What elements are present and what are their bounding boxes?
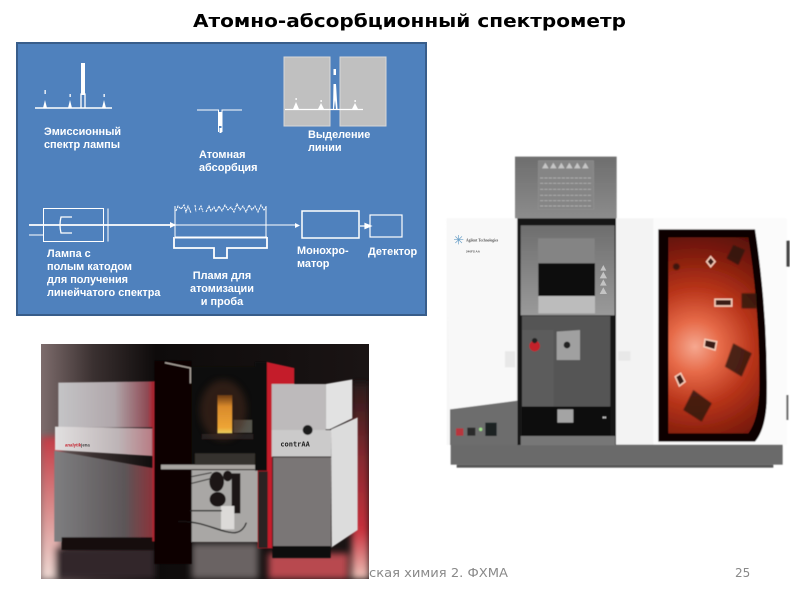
left unit [58,381,152,427]
label: lamp: для получения [47,274,128,286]
icon: warning triangles [600,265,607,294]
icon: Agilent spark [454,235,463,244]
label: lamp: полым катодом [47,261,132,273]
right unit [272,384,326,430]
centre cabinet [154,361,192,564]
side handle [786,241,790,267]
label: emission spectrum: Эмиссионный [44,126,121,138]
diagram: hollow cathode lamp [29,208,175,242]
chart: line isolation slits [284,57,386,126]
diagram: monochromator [302,211,359,238]
lid [515,157,617,218]
photo: Agilent spectrometer [447,157,790,468]
mechanics [209,471,240,513]
label: line isolation: линии [308,142,342,154]
label: emission spectrum: спектр лампы [44,139,120,151]
diagram: flame atomizer [170,204,300,258]
label: atomic absorption: абсорбция [199,162,257,174]
label: flame: и проба [201,296,244,308]
page number: 25 [735,566,750,580]
photo: contrAA spectrometer [41,344,369,579]
label: atomic absorption: Атомная [199,149,245,161]
brand: analytikjena: analytikjena [65,442,90,447]
title: Атомно-абсорбционный спектрометр [193,11,626,32]
chart: atomic absorption [197,110,242,133]
window frame [658,229,767,442]
red side [255,362,294,548]
centre bay [517,218,616,445]
lamps [673,245,757,422]
brand: Agilent: Agilent Technologies [466,238,499,242]
label: monochromator: матор [297,258,330,270]
chart: lamp emission spectrum [35,63,112,108]
buttons [456,428,463,436]
brand: contrAA: contrAA [280,441,311,449]
label: lamp: Лампа с [47,248,91,260]
door latches [505,351,515,367]
panel: spectrometer schematic [17,43,426,315]
label: lamp: линейчатого спектра [47,287,161,299]
label: detector: Детектор [368,246,417,258]
label: line isolation: Выделение [308,129,370,141]
base [451,445,783,465]
model label: 240FS AA [466,249,481,253]
label: flame: Пламя для [193,270,251,282]
label: monochromator: Монохро- [297,245,349,257]
arrow: to detector [360,224,371,228]
diagram: detector [370,215,402,237]
body [447,218,787,445]
footer text: ская химия 2. ФХМА [369,566,509,580]
label: flame: атомизации [190,283,254,295]
